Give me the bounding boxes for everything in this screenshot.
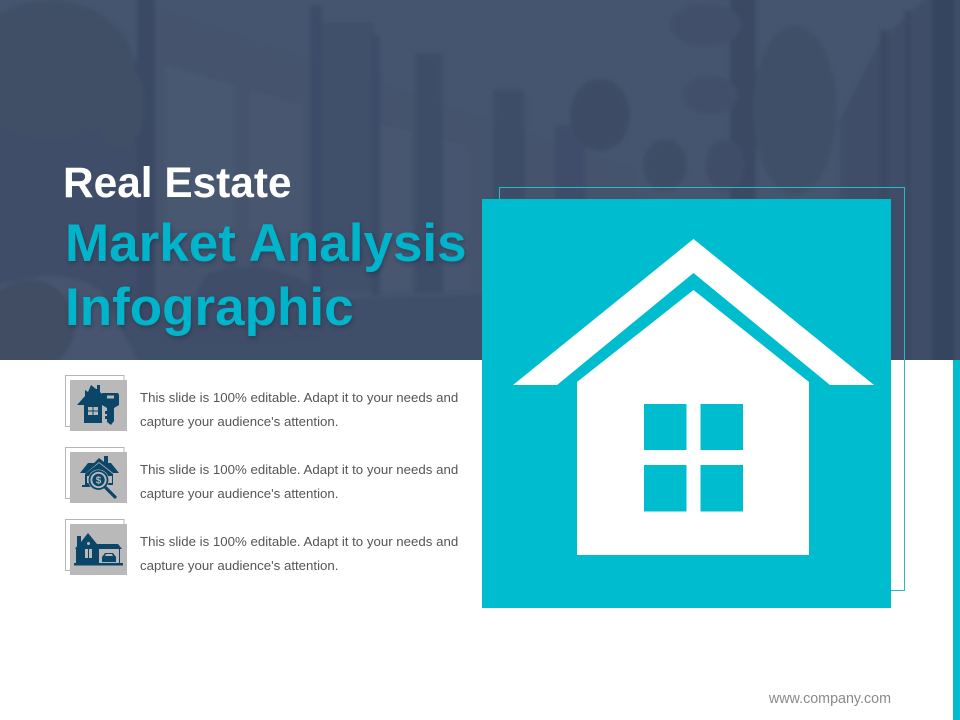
- title: Market Analysis Infographic: Infographic: [65, 278, 354, 337]
- item 3: description: [140, 534, 458, 573]
- item 2: description: [140, 462, 458, 501]
- item 1: description: capture your audience's attention.: [140, 414, 338, 429]
- item 3: description: This slide is 100% editable. Adapt it to your needs and: [140, 534, 458, 549]
- item 2: icon house with magnifier and dollar: [65, 447, 127, 503]
- hero: teal panel with house icon: [482, 199, 891, 608]
- decorative teal bar on right edge: [953, 360, 960, 720]
- header photo background: street of commercial buildings: [0, 0, 960, 360]
- item 2: description: This slide is 100% editable. Adapt it to your needs and: [140, 462, 458, 477]
- item 3: icon house with garage and car: [65, 519, 127, 575]
- title: Market Analysis Infographic: [65, 214, 467, 338]
- item 1: icon house and key: [65, 375, 127, 431]
- item 2: description: capture your audience's attention.: [140, 486, 338, 501]
- ground and parked cars: [0, 290, 840, 365]
- footer: website: www.company.com: [769, 691, 891, 707]
- item 3: description: capture your audience's attention.: [140, 558, 338, 573]
- building mass: [137, 0, 640, 360]
- icon: window panes: [644, 404, 743, 512]
- hero: thin outline frame behind teal panel: [499, 187, 905, 591]
- title: Market Analysis Infographic: Market Analysis: [65, 214, 467, 273]
- icon: roof: [513, 239, 874, 385]
- item 1: description: This slide is 100% editable. Adapt it to your needs and: [140, 390, 458, 405]
- roller shutters: [165, 65, 235, 230]
- right building: [840, 0, 960, 365]
- title: Real Estate: Real Estate: [63, 159, 292, 206]
- icon: house body: [577, 290, 809, 555]
- trees: [0, 0, 135, 140]
- item 2: icon house with magnifier and dollar: $: [96, 476, 102, 487]
- item 1: description: [140, 390, 458, 429]
